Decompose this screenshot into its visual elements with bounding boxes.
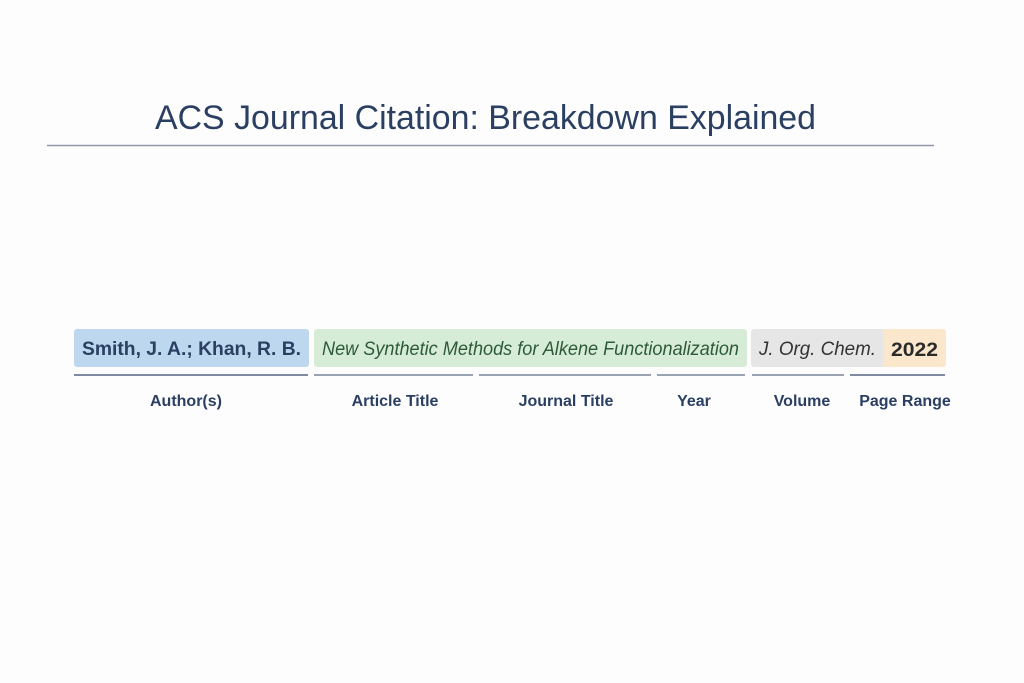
- label: page range: Page Range: [859, 393, 951, 410]
- label: authors: Author(s): [150, 393, 222, 410]
- label: page range: [850, 375, 951, 410]
- segment: article title: New Synthetic Methods for Alkene Functionalization: [322, 339, 739, 360]
- label: article title: Article Title: [352, 393, 439, 410]
- label: volume: Volume: [774, 393, 830, 410]
- segment: year: [883, 329, 946, 367]
- label: journal title: Journal Title: [519, 393, 614, 410]
- title: ACS Journal Citation: Breakdown Explained: [155, 99, 816, 137]
- segment: article title: [314, 329, 747, 367]
- segment: year: 2022: [891, 340, 938, 361]
- citation bar: [74, 329, 946, 367]
- label: volume: [752, 375, 844, 410]
- segment: journal: [751, 329, 887, 367]
- label row: [74, 375, 951, 410]
- segment: authors: Smith, J. A.; Khan, R. B.: [82, 339, 301, 360]
- segment: authors: [74, 329, 309, 367]
- label: year: Year: [677, 393, 711, 410]
- segment: journal: J. Org. Chem.: [758, 339, 876, 360]
- label: year: [657, 375, 745, 410]
